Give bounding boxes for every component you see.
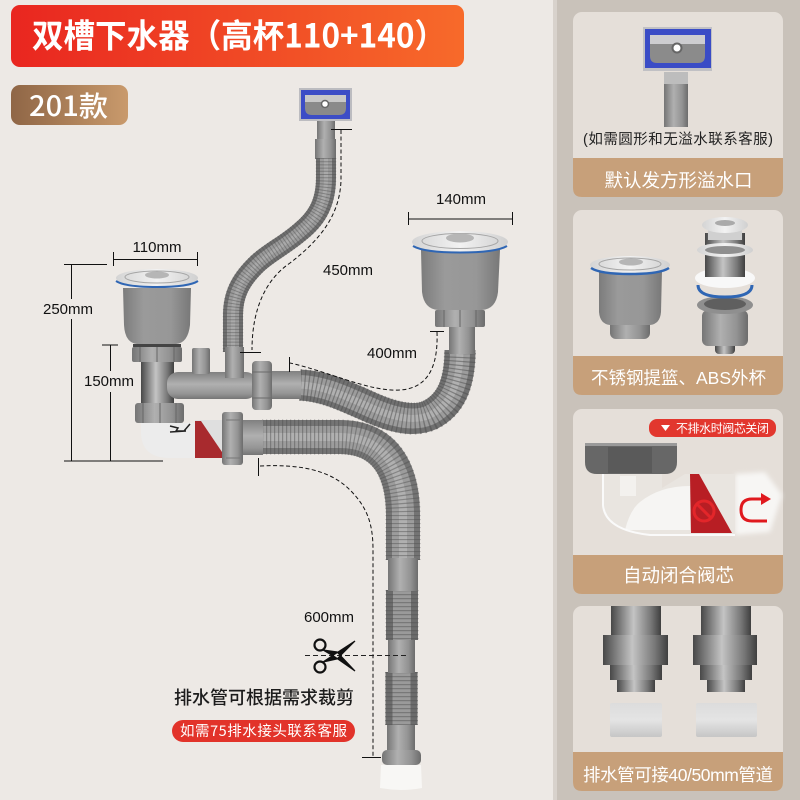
dimension: 250mm xyxy=(43,264,163,461)
right connector xyxy=(693,606,757,737)
dimension: 140mm: 140mm xyxy=(436,191,486,208)
corrugated hose to large drain xyxy=(300,350,460,419)
red valve flap xyxy=(690,474,732,533)
large drain xyxy=(412,231,508,354)
corrugated overflow hose xyxy=(233,158,326,352)
small drain xyxy=(116,269,198,423)
panel: stainless basket xyxy=(573,210,783,395)
threaded nut xyxy=(585,443,677,474)
connector label: 排水管可接40/50mm管道 xyxy=(583,765,773,785)
transparent valve body xyxy=(603,472,782,535)
corrugated outlet hose xyxy=(262,437,403,725)
panel: square overflow xyxy=(573,12,783,197)
left connector xyxy=(603,606,668,737)
red status pill: 不排水时阀芯关闭 xyxy=(676,422,769,436)
overflow note: (如需圆形和无溢水联系客服) xyxy=(583,131,773,148)
tee pipe xyxy=(167,347,301,410)
dimension: 600mm: 600mm xyxy=(304,609,354,626)
dimension: 150mm xyxy=(84,345,134,461)
red note pill: 如需75排水接头联系客服 xyxy=(180,720,348,741)
red flow arrow xyxy=(741,493,771,521)
panel: drain connector xyxy=(573,606,783,791)
dimension: 450mm: 450mm xyxy=(323,262,373,279)
dimension: 110mm xyxy=(114,239,198,266)
product diagram: double sink drain xyxy=(116,88,508,790)
overflow label: 默认发方形溢水口 xyxy=(604,170,753,191)
overflow head xyxy=(299,88,352,159)
dimension: 450mm xyxy=(240,130,373,352)
dimension: 140mm xyxy=(408,191,512,225)
model badge xyxy=(11,85,128,125)
basket label: 不锈钢提篮、ABS外杯 xyxy=(591,368,767,388)
note: hose can be cut: 排水管可根据需求裁剪 xyxy=(174,684,354,710)
right column background xyxy=(553,0,800,800)
dimension: 110mm: 110mm xyxy=(133,239,181,256)
title banner: 双槽下水器（高杯110+140） xyxy=(32,10,446,58)
valve label: 自动闭合阀芯 xyxy=(623,565,734,586)
overflow product image xyxy=(643,27,712,127)
dimension: 400mm: 400mm xyxy=(367,345,417,362)
dimension: 150mm: 150mm xyxy=(84,373,134,390)
panel: auto closing valve xyxy=(573,409,783,594)
assembled drain image xyxy=(590,256,670,339)
dimension: 400mm xyxy=(290,332,444,390)
dimension: 250mm: 250mm xyxy=(43,301,93,318)
red status pill xyxy=(649,419,776,437)
dimension: 600mm xyxy=(258,458,381,758)
icon: scissors with cut line xyxy=(305,640,408,672)
exploded drain image xyxy=(695,217,755,354)
model badge: 201款 xyxy=(29,85,108,125)
outlet plain sections and cuff xyxy=(380,558,422,790)
anti-odour elbow and valve xyxy=(141,412,263,465)
